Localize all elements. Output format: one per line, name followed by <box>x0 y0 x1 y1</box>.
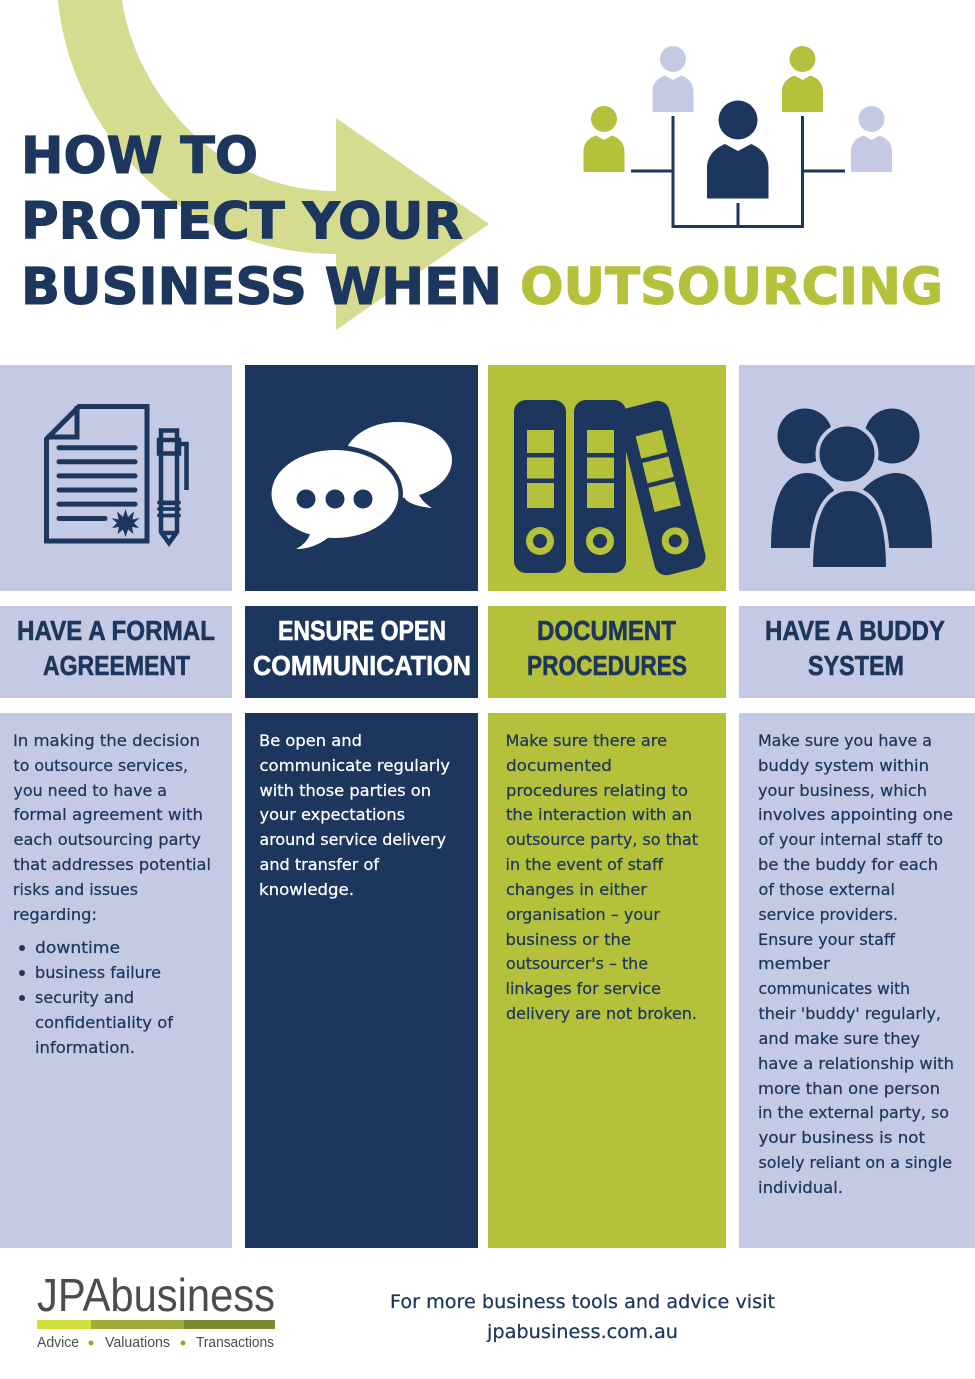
panel: buddy system text: more than one person <box>758 1079 940 1098</box>
logo: JPAbusiness: Transactions <box>196 1334 274 1351</box>
panel: procedures text: changes in either <box>506 880 647 899</box>
panel: formal agreement text: regarding: <box>13 905 97 924</box>
panel: buddy system text: have a relationship with <box>758 1054 954 1073</box>
title: HOW TO <box>21 127 258 186</box>
heading: ensure open communication <box>245 606 478 698</box>
panel: procedures text: outsourcer's – the <box>506 954 648 973</box>
panel: buddy system text: of those external <box>758 880 895 899</box>
logo: JPAbusiness <box>37 1269 275 1351</box>
heading: document procedures <box>488 606 726 698</box>
footer call to action: jpabusiness.com.au <box>486 1321 678 1343</box>
panel: procedures text: procedures relating to <box>506 781 688 800</box>
heading: ensure open communication: ENSURE OPEN <box>278 615 446 646</box>
decorative curved arrow behind title <box>58 0 489 330</box>
icon: binders <box>514 398 708 578</box>
panel: buddy system text: Ensure your staff <box>758 930 896 949</box>
panel: buddy system text: be the buddy for each <box>758 855 938 874</box>
panel: formal agreement text: that addresses potential <box>14 855 211 874</box>
panel: procedures text: Make sure there are <box>506 731 667 750</box>
panel: buddy system text: their 'buddy' regularly, <box>758 1004 941 1023</box>
panel: procedures text: delivery are not broken. <box>506 1004 697 1023</box>
panel: formal agreement text: In making the decision <box>13 731 200 750</box>
panel: buddy system text: of your internal staff to <box>758 830 943 849</box>
bullet list: business failure <box>35 963 161 982</box>
title <box>21 127 943 317</box>
panel: procedures text: organisation – your <box>506 905 660 924</box>
panel: communication text: and transfer of <box>260 855 379 874</box>
panel: buddy system text: communicates with <box>758 979 910 998</box>
panel: procedures text: documented <box>506 756 612 775</box>
panel: buddy system text <box>739 713 975 1248</box>
heading: have a formal agreement: AGREEMENT <box>43 650 190 681</box>
panel: procedures icon <box>488 365 726 591</box>
panel: procedures text: business or the <box>506 930 631 949</box>
panel: communication text: around service delivery <box>260 830 446 849</box>
heading: have a formal agreement <box>0 606 232 698</box>
title: OUTSOURCING <box>520 258 943 317</box>
heading: document procedures: DOCUMENT <box>537 615 676 646</box>
panel: buddy system text: Make sure you have a <box>758 731 932 750</box>
panel: buddy system text: involves appointing one <box>758 805 953 824</box>
panel: buddy system text: your business is not <box>758 1128 925 1147</box>
panel: formal agreement text: you need to have a <box>14 781 167 800</box>
panel: procedures text <box>488 713 726 1248</box>
title: PROTECT YOUR <box>21 192 463 252</box>
bullet list: downtime <box>35 938 120 957</box>
panel: procedures text: outsource party, so that <box>506 830 698 849</box>
panel: formal agreement text: to outsource services, <box>14 756 188 775</box>
bullet list: security and <box>35 988 134 1007</box>
panel: buddy system icon <box>739 365 975 591</box>
bullet list <box>19 938 173 1057</box>
heading: have a buddy system <box>739 606 975 698</box>
logo: JPAbusiness: Valuations <box>105 1334 170 1351</box>
panel: buddy system text: and make sure they <box>758 1029 920 1048</box>
heading: document procedures: PROCEDURES <box>527 650 687 681</box>
panel: buddy system text: in the external party, so <box>758 1103 949 1122</box>
panel: procedures text: in the event of staff <box>506 855 664 874</box>
heading: ensure open communication: COMMUNICATION <box>253 650 471 681</box>
panel: communication text: knowledge. <box>259 880 354 899</box>
footer call to action <box>390 1291 775 1343</box>
panel: buddy system text: buddy system within <box>758 756 929 775</box>
bullet list: information. <box>35 1038 135 1057</box>
panel: formal agreement icon <box>0 365 232 591</box>
icon: contract and pen <box>46 406 186 543</box>
logo: JPAbusiness: JPAbusiness <box>37 1269 275 1321</box>
heading: have a buddy system: HAVE A BUDDY <box>765 615 945 646</box>
panel: procedures text: the interaction with an <box>506 805 692 824</box>
heading: have a buddy system: SYSTEM <box>808 650 904 681</box>
logo: JPAbusiness: Advice <box>37 1334 79 1351</box>
panel: formal agreement text: each outsourcing party <box>14 830 201 849</box>
panel: buddy system text: solely reliant on a single <box>758 1153 952 1172</box>
bullet list: confidentiality of <box>35 1013 173 1032</box>
panel: procedures text: linkages for service <box>506 979 661 998</box>
panel: communication icon <box>245 365 478 591</box>
panel: buddy system text: member <box>758 954 830 973</box>
footer call to action: For more business tools and advice visit <box>390 1291 775 1313</box>
heading: have a formal agreement: HAVE A FORMAL <box>17 615 215 646</box>
panel: communication text: communicate regularly <box>260 756 450 775</box>
panel: formal agreement text: formal agreement with <box>14 805 203 824</box>
panel: formal agreement text <box>0 713 232 1248</box>
icon: network of people <box>584 46 892 226</box>
panel: communication text <box>245 713 478 1248</box>
panel: buddy system text: service providers. <box>758 905 898 924</box>
panel: communication text: your expectations <box>260 805 405 824</box>
title: BUSINESS WHEN <box>21 258 502 317</box>
panel: formal agreement text: risks and issues <box>13 880 138 899</box>
panel: buddy system text: individual. <box>758 1178 843 1197</box>
panel: communication text: with those parties on <box>260 781 431 800</box>
panel: communication text: Be open and <box>259 731 362 750</box>
icon: group of people <box>771 408 932 572</box>
icon: speech bubbles <box>267 422 452 549</box>
panel: buddy system text: your business, which <box>758 781 927 800</box>
